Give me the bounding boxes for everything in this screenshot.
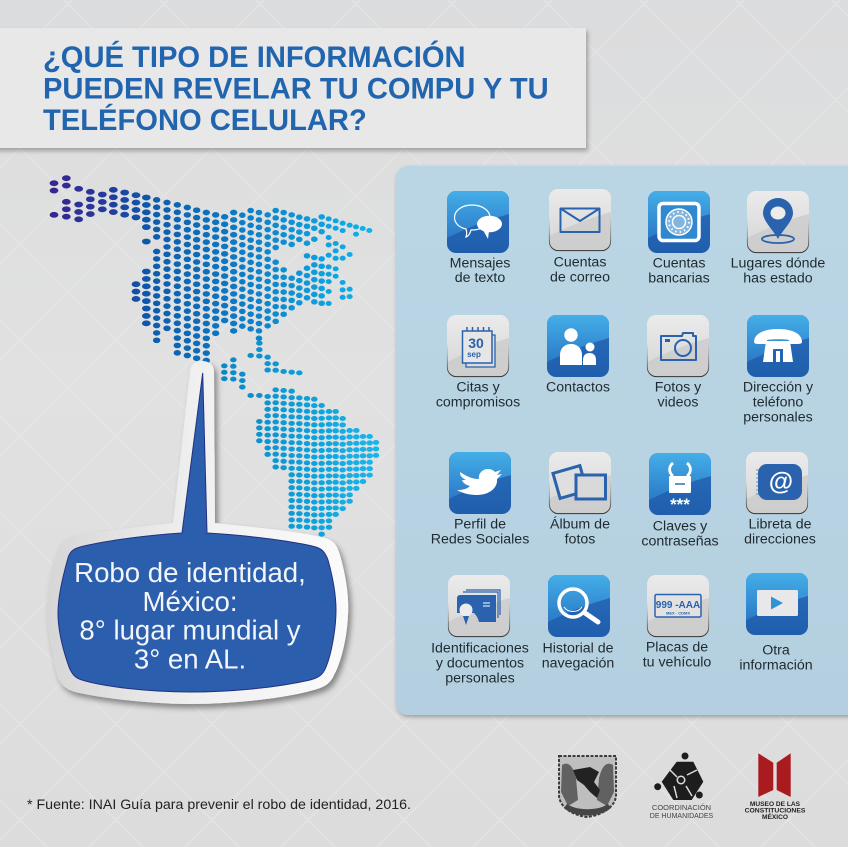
icon: people xyxy=(547,315,609,377)
tile: historial xyxy=(542,575,614,672)
source note: * Fuente: INAI Guía para prevenir el robo de identidad, 2016. xyxy=(27,796,411,812)
label: fotos xyxy=(565,531,595,547)
icon: photo frames xyxy=(549,452,611,514)
logo: Museo de las Constituciones: MUSEO DE LAS xyxy=(750,801,801,808)
label: personales xyxy=(445,671,515,687)
tile: redes sociales xyxy=(431,452,529,547)
logo: Museo de las Constituciones xyxy=(745,753,806,821)
label: Libreta de xyxy=(748,516,812,532)
callout text: 3° en AL. xyxy=(134,644,246,674)
logo: UNAM crest xyxy=(559,756,616,817)
icon: license plate: 999 -AAA xyxy=(656,600,700,611)
logo: Museo de las Constituciones: CONSTITUCIONES xyxy=(745,808,806,814)
label: videos xyxy=(657,395,699,411)
logo: Coordinación de Humanidades xyxy=(650,752,714,820)
label: navegación xyxy=(542,656,614,672)
dot map of the Americas xyxy=(54,176,376,535)
icon: video player xyxy=(746,573,808,635)
tile: libreta xyxy=(744,452,816,547)
icon: map pin xyxy=(747,191,809,253)
label: de correo xyxy=(550,270,610,286)
label: bancarias xyxy=(648,271,710,287)
title: PUEDEN REVELAR TU COMPU Y TU xyxy=(43,74,549,106)
label: Cuentas xyxy=(653,256,705,272)
logo: Coordinación de Humanidades: COORDINACIÓN xyxy=(652,803,711,812)
tile: citas xyxy=(436,315,520,411)
tile: lugares xyxy=(731,191,825,287)
icon: speech bubbles xyxy=(447,191,509,253)
icon: calendar xyxy=(447,315,509,377)
tile: cuentas de correo xyxy=(549,189,611,286)
label: Claves y xyxy=(653,519,708,535)
tile: contactos xyxy=(546,315,610,396)
icon: address book: @ xyxy=(769,468,793,496)
title: TELÉFONO CELULAR? xyxy=(43,103,367,137)
label: Historial de xyxy=(543,641,614,657)
label: Cuentas xyxy=(554,255,606,271)
icon: license plate: MEX · CDMX xyxy=(666,610,690,616)
label: de texto xyxy=(455,270,505,286)
label: Mensajes xyxy=(450,255,510,271)
label: Fotos y xyxy=(655,380,702,396)
icon: calendar: sep xyxy=(467,350,481,359)
label: contraseñas xyxy=(641,534,719,550)
icon: padlock: *** xyxy=(670,495,690,514)
label: direcciones xyxy=(744,531,816,547)
panel: types of information xyxy=(396,166,848,715)
tile: álbum de fotos xyxy=(549,452,611,547)
label: Identificaciones xyxy=(431,641,529,657)
tile: placas xyxy=(643,575,711,671)
icon: bird xyxy=(449,452,511,514)
label: teléfono xyxy=(753,395,803,411)
label: Redes Sociales xyxy=(431,531,529,547)
icon: calendar: 30 xyxy=(468,335,484,351)
label: información xyxy=(739,657,813,673)
logo: Coordinación de Humanidades: DE HUMANIDADES xyxy=(650,813,714,820)
icon: license plate xyxy=(647,575,709,637)
label: has estado xyxy=(743,271,813,287)
logo: Museo de las Constituciones: MÉXICO xyxy=(762,812,788,821)
label: y documentos xyxy=(436,656,524,672)
label: personales xyxy=(743,410,813,426)
callout text: Robo de identidad, xyxy=(74,557,306,588)
tile: dirección y teléfono xyxy=(743,315,814,426)
icon: id cards xyxy=(448,575,510,637)
label: Otra xyxy=(762,642,790,658)
label: Placas de xyxy=(646,640,708,656)
callout text: 8° lugar mundial y xyxy=(79,614,301,646)
icon: safe dial xyxy=(648,191,710,253)
label: compromisos xyxy=(436,395,520,411)
label: Perfil de xyxy=(454,516,506,532)
title banner xyxy=(0,28,586,148)
tile: otra información xyxy=(739,573,813,673)
icon: telephone xyxy=(747,315,809,377)
label: Dirección y xyxy=(743,380,814,396)
title: ¿QUÉ TIPO DE INFORMACIÓN xyxy=(43,40,466,74)
icon: magnifier xyxy=(548,575,610,637)
label: Contactos xyxy=(546,380,610,396)
label: tu vehículo xyxy=(643,655,711,671)
tile: cuentas bancarias xyxy=(648,191,710,287)
icon: envelope xyxy=(549,189,611,251)
callout: identity theft xyxy=(47,361,348,704)
tile: mensajes de texto xyxy=(447,191,510,286)
label: Álbum de xyxy=(550,515,610,532)
icon: camera xyxy=(647,315,709,377)
label: Citas y xyxy=(456,380,501,396)
callout text: México: xyxy=(142,586,238,617)
tile: claves xyxy=(641,453,719,550)
label: Lugares dónde xyxy=(731,256,825,272)
tile: identificaciones xyxy=(431,575,529,687)
tile: fotos y videos xyxy=(647,315,709,411)
